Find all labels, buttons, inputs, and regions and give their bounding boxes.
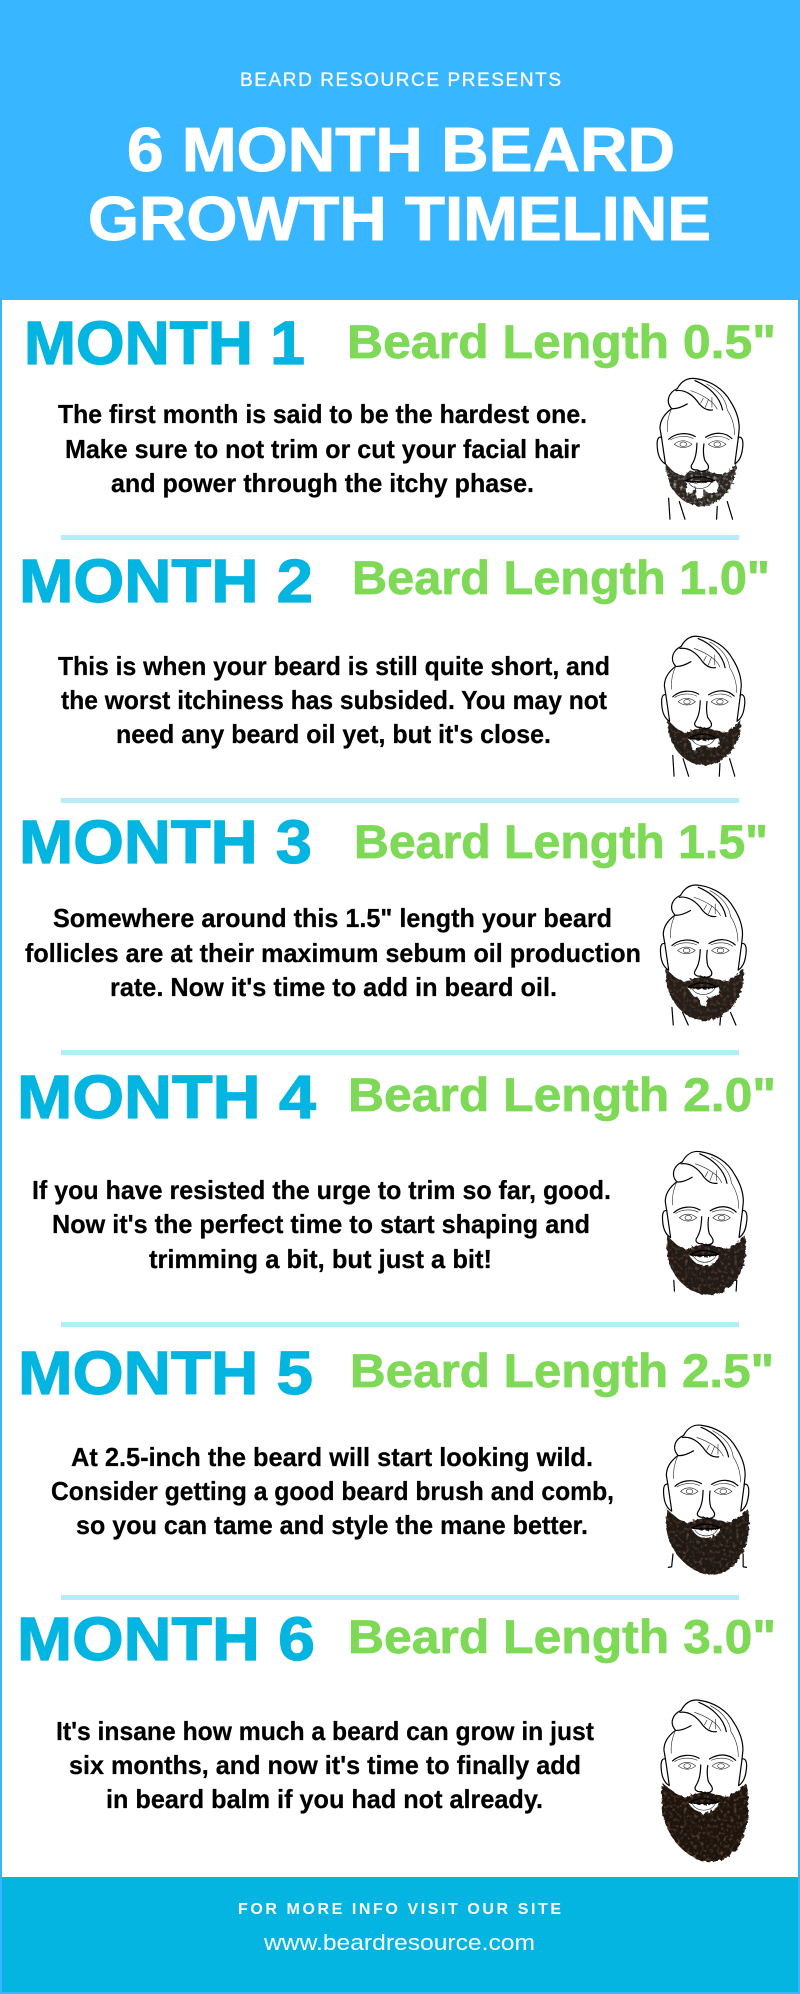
month 4 description: Now it's the perfect time to start shaping and (52, 1209, 590, 1239)
panel: month 2 (19, 547, 770, 776)
panel: month 3 (19, 808, 768, 1025)
month 3 description (25, 903, 641, 1002)
icon: bearded face, month 5 (664, 1425, 749, 1575)
month 4 description: If you have resisted the urge to trim so far, good. (32, 1175, 611, 1205)
month 4 heading: MONTH 4 (17, 1063, 316, 1131)
month 5 heading: MONTH 5 (18, 1339, 313, 1407)
month 3 heading: MONTH 3 (19, 808, 312, 876)
footer call to action: FOR MORE INFO VISIT OUR SITE (238, 1901, 561, 1918)
month 1 description: Make sure to not trim or cut your facial hair (65, 434, 580, 464)
header band (0, 0, 800, 300)
month 2 beard length: Beard Length 1.0" (352, 551, 770, 604)
month 1 description: The first month is said to be the hardest one. (58, 399, 587, 429)
month 6 description: in beard balm if you had not already. (106, 1784, 543, 1814)
icon: bearded face, month 2 (662, 636, 745, 776)
month 1 heading: MONTH 1 (24, 309, 305, 377)
panel: month 1 (24, 309, 776, 519)
divider (61, 1050, 739, 1055)
icon: bearded face, month 1 (657, 378, 743, 519)
icon: bearded face, month 4 (662, 1151, 747, 1295)
divider (61, 798, 739, 803)
footer band (2, 1877, 798, 1992)
presenter line: BEARD RESOURCE PRESENTS (240, 70, 561, 91)
month 3 description: Somewhere around this 1.5" length your beard (53, 903, 612, 933)
month 4 description: trimming a bit, but just a bit! (149, 1244, 492, 1274)
icon: bearded face, month 6 (661, 1700, 748, 1862)
month 3 description: rate. Now it's time to add in beard oil. (110, 972, 557, 1002)
title (88, 116, 711, 254)
month 2 description: This is when your beard is still quite short, and (58, 651, 610, 681)
month 2 description: need any beard oil yet, but it's close. (116, 719, 551, 749)
panel: month 4 (17, 1063, 776, 1295)
title: GROWTH TIMELINE (88, 185, 711, 254)
month 1 description: and power through the itchy phase. (111, 468, 534, 498)
divider (61, 1322, 739, 1327)
month 1 beard length: Beard Length 0.5" (347, 315, 776, 368)
month 6 description: It's insane how much a beard can grow in just (56, 1716, 594, 1746)
month 2 description (58, 651, 610, 749)
month 5 description (51, 1442, 614, 1540)
content panel (2, 300, 798, 1877)
month 4 description (32, 1175, 611, 1274)
panel: month 5 (18, 1339, 774, 1575)
month 6 heading: MONTH 6 (17, 1605, 315, 1673)
month 4 beard length: Beard Length 2.0" (348, 1068, 776, 1121)
header (0, 0, 800, 300)
month 5 beard length: Beard Length 2.5" (350, 1344, 774, 1397)
divider (61, 535, 739, 540)
month 6 description (56, 1716, 594, 1814)
month 2 heading: MONTH 2 (19, 547, 313, 615)
month 1 description (58, 399, 587, 498)
divider (61, 1595, 739, 1600)
month 3 beard length: Beard Length 1.5" (354, 815, 768, 868)
footer (2, 1877, 798, 1992)
title: 6 MONTH BEARD (127, 116, 675, 185)
month 6 beard length: Beard Length 3.0" (348, 1610, 776, 1663)
month 2 description: the worst itchiness has subsided. You may not (61, 685, 607, 715)
month 3 description: follicles are at their maximum sebum oil production (25, 938, 641, 968)
panel: month 6 (17, 1605, 776, 1862)
footer url: www.beardresource.com (263, 1930, 535, 1955)
month 5 description: so you can tame and style the mane better. (76, 1510, 588, 1540)
icon: bearded face, month 3 (660, 885, 746, 1025)
month 5 description: At 2.5-inch the beard will start looking wild. (71, 1442, 593, 1472)
month 6 description: six months, and now it's time to finally add (69, 1750, 581, 1780)
month 5 description: Consider getting a good beard brush and comb, (51, 1476, 614, 1506)
